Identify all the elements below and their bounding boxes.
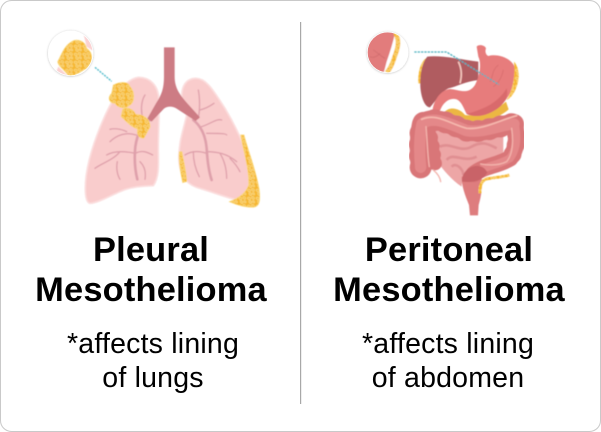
tumour: right lung inner bbox=[179, 152, 187, 183]
panel: pleural mesothelioma: Mesothelioma bbox=[35, 271, 268, 309]
text: affects lining of lungs: *affects lining bbox=[67, 328, 239, 360]
dashed leader bbox=[414, 52, 499, 85]
colon fat bbox=[480, 175, 509, 193]
small intestine bbox=[432, 130, 503, 187]
tumour: right lung outer bbox=[229, 135, 260, 207]
trachea and bronchi bbox=[147, 47, 200, 122]
omentum fat bbox=[445, 102, 509, 124]
left lung bbox=[85, 77, 159, 203]
stomach bbox=[433, 45, 516, 116]
rectum bbox=[462, 177, 482, 215]
tumour: hilum chain bbox=[121, 108, 150, 138]
text: affects lining of abdomen: *affects lining bbox=[362, 328, 534, 360]
bronchial tree bbox=[95, 90, 240, 180]
heading: Pleural Mesothelioma: Pleural bbox=[93, 231, 209, 269]
ascending and transverse colon base bbox=[420, 120, 514, 167]
tumour: upper left lung bbox=[109, 82, 134, 108]
illustration: lungs bbox=[85, 47, 260, 207]
callout: magnified peritoneum bbox=[367, 32, 410, 73]
panel: pleural mesothelioma: of lungs bbox=[102, 362, 204, 394]
panel: pleural mesothelioma bbox=[35, 31, 268, 394]
liver fat bbox=[418, 58, 427, 83]
illustration: digestive system bbox=[414, 45, 519, 215]
callout: magnified tumour bbox=[48, 31, 97, 78]
tumours bbox=[109, 82, 260, 207]
right lung bbox=[179, 78, 258, 202]
dashed leader bbox=[95, 67, 112, 81]
liver bbox=[420, 56, 478, 107]
inner ascending colon bbox=[430, 133, 435, 163]
stomach fat bbox=[507, 62, 519, 100]
colon highlights bbox=[420, 120, 514, 167]
heading: Peritoneal Mesothelioma: Peritoneal bbox=[365, 231, 533, 269]
panel: peritoneal mesothelioma: of abdomen bbox=[372, 362, 524, 394]
colon bbox=[420, 116, 517, 215]
panel: peritoneal mesothelioma: Mesothelioma bbox=[333, 271, 566, 309]
descending and sigmoid colon bbox=[474, 125, 516, 174]
panel: peritoneal mesothelioma bbox=[333, 32, 566, 394]
